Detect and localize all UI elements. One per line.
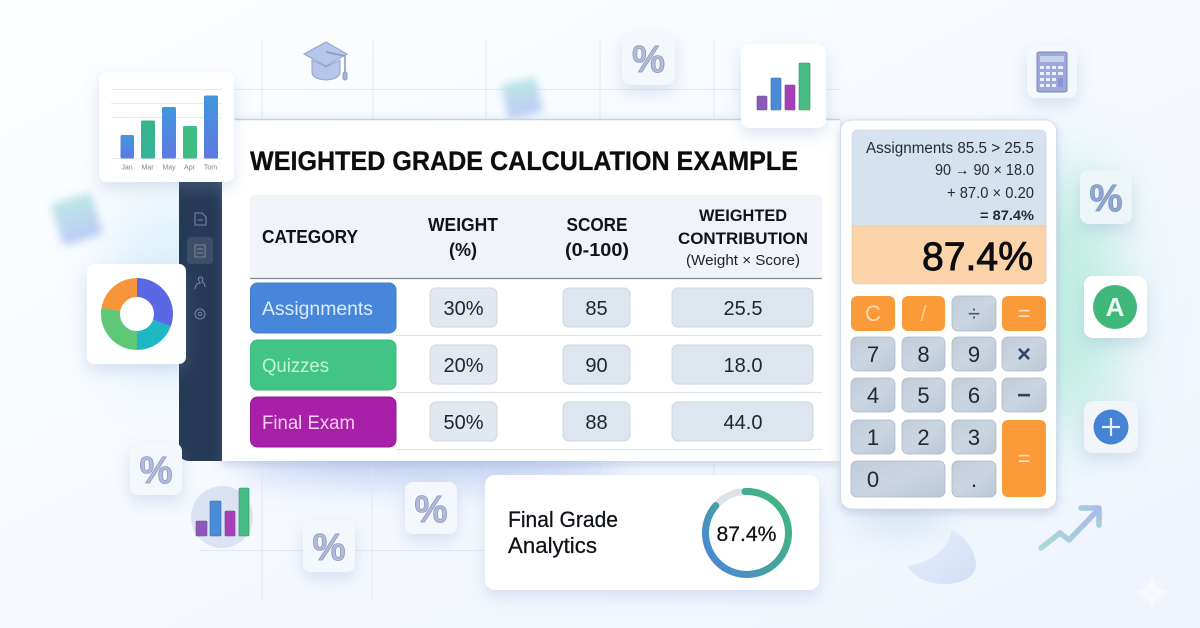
calculator keypad: = — [1018, 446, 1030, 471]
calculator display: = 87.4% — [980, 207, 1035, 223]
icon: bar chart badge — [191, 486, 253, 548]
bar chart card: Jan — [121, 164, 133, 172]
table header: SCORE — [566, 215, 628, 235]
final grade analytics card: Final Grade — [508, 507, 618, 532]
icon tile: percent bottom center — [405, 482, 457, 534]
icon tile: percent left: % — [140, 450, 172, 492]
row: quizzes: 20% — [443, 355, 484, 377]
icon tile: plus — [1084, 401, 1138, 453]
calculator display: 87.4% — [922, 235, 1033, 279]
calculator keypad: 7 — [867, 342, 879, 367]
calculator keypad — [851, 296, 1046, 497]
row: final exam: 50% — [443, 412, 484, 434]
row: quizzes: 18.0 — [724, 355, 762, 377]
calculator keypad: 5 — [917, 383, 930, 408]
table header: CATEGORY — [262, 227, 358, 247]
decoration: blue curved shape — [907, 530, 976, 584]
calculator keypad: = — [1018, 301, 1030, 326]
icon tile: percent left — [130, 443, 182, 495]
icon tile: percent right — [1080, 170, 1132, 224]
table header: (0-100) — [565, 240, 629, 260]
sidebar — [179, 182, 224, 461]
calculator keypad: 4 — [867, 383, 879, 408]
icon tile: percent bottom center: % — [414, 489, 448, 531]
row: quizzes — [250, 340, 813, 390]
row: final exam: Final Exam — [262, 412, 355, 434]
calculator keypad: 3 — [968, 425, 980, 450]
icon tile: percent right: % — [1090, 178, 1122, 220]
row: assignments: 25.5 — [724, 298, 762, 320]
blurred square left — [50, 192, 104, 246]
row: quizzes: 90 — [585, 355, 608, 377]
icon tile: bar chart top — [741, 44, 826, 128]
final grade analytics card — [485, 475, 819, 590]
calculator — [840, 120, 1056, 509]
row: assignments: Assignments — [262, 298, 373, 320]
blurred square top — [501, 77, 543, 119]
icon tile: percent top — [622, 32, 675, 85]
row: assignments — [250, 283, 813, 333]
calculator keypad: − — [1017, 382, 1031, 409]
table header: CONTRIBUTION — [678, 229, 808, 248]
decoration: sparkle — [1134, 574, 1170, 611]
icon tile: percent top: % — [632, 39, 665, 81]
icon tile: calculator — [1027, 46, 1077, 98]
icon tile: grade A: A — [1106, 292, 1125, 322]
row: assignments: 85 — [585, 298, 608, 320]
calculator display: Assignments 85.5 > 25.5 — [866, 140, 1034, 157]
row: final exam: 44.0 — [724, 412, 762, 434]
row: assignments: 30% — [443, 298, 484, 320]
icon tile: grade A — [1084, 276, 1147, 338]
table header: WEIGHTED — [699, 206, 787, 225]
calculator display — [852, 130, 1046, 284]
icon: graduation cap — [304, 42, 347, 80]
calculator keypad: / — [920, 301, 927, 326]
final grade analytics card: Analytics — [508, 533, 597, 558]
row: quizzes: Quizzes — [262, 355, 329, 377]
calculator keypad: C — [865, 301, 881, 326]
calculator display: 90 → 90 × 18.0 — [935, 162, 1034, 179]
icon tile: percent bottom left: % — [312, 527, 346, 569]
calculator keypad: 1 — [867, 425, 879, 450]
gauge ring — [706, 491, 789, 574]
table header: (%) — [449, 240, 477, 260]
icon tile: percent bottom left — [303, 520, 355, 572]
donut chart card — [87, 264, 186, 364]
bar chart card: Tom — [204, 164, 217, 172]
calculator keypad: 9 — [968, 342, 980, 367]
main panel — [179, 120, 840, 461]
calculator keypad: 0 — [867, 467, 879, 492]
table card — [222, 120, 840, 461]
row: final exam — [250, 397, 813, 447]
calculator display: + 87.0 × 0.20 — [947, 185, 1034, 202]
calculator keypad: 2 — [917, 425, 930, 450]
bar chart card: Mar — [141, 164, 154, 172]
calculator keypad: ÷ — [968, 301, 980, 326]
table header: WEIGHT — [428, 215, 498, 235]
calculator keypad: 8 — [917, 342, 930, 367]
gauge ring: 87.4% — [716, 522, 776, 546]
bar chart card: May — [162, 164, 176, 172]
title: WEIGHTED GRADE CALCULATION EXAMPLE — [250, 146, 798, 176]
bar chart card — [99, 72, 234, 182]
calculator keypad: . — [971, 467, 977, 492]
table header — [250, 195, 822, 278]
calculator keypad: 6 — [968, 383, 980, 408]
bar chart card: Apr — [184, 164, 196, 172]
icon: trend arrow — [1041, 508, 1099, 548]
calculator keypad: × — [1017, 341, 1031, 368]
row: final exam: 88 — [585, 412, 608, 434]
table header: (Weight × Score) — [686, 252, 800, 269]
